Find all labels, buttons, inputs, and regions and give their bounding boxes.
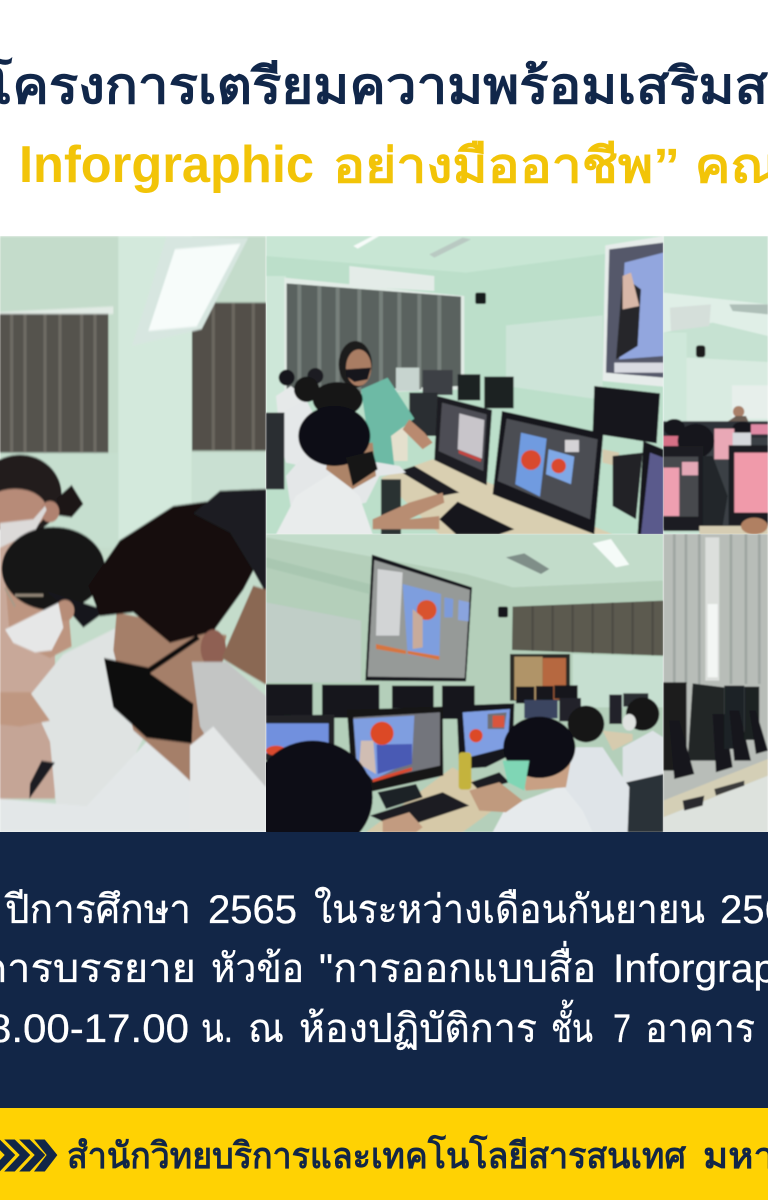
keyboards xyxy=(370,772,509,829)
background screens xyxy=(663,424,768,459)
student at front of teacher xyxy=(286,382,406,519)
right monitor xyxy=(457,703,514,769)
info line 3: ชั้น xyxy=(551,999,593,1051)
photo: students facing projected screen xyxy=(253,534,663,854)
info line 2 xyxy=(0,941,768,991)
left whiteboard xyxy=(266,602,361,682)
desks xyxy=(381,428,619,534)
monitors from behind xyxy=(663,682,768,779)
dark row of students xyxy=(663,421,768,438)
pillar xyxy=(664,334,686,420)
background monitors xyxy=(396,368,514,436)
lower wall xyxy=(573,654,663,707)
speaker xyxy=(475,293,486,304)
seated student xyxy=(678,424,728,526)
monitor three xyxy=(638,441,663,534)
front student with green mask xyxy=(469,717,593,832)
organisation name: สำนักวิทยบริการและเทคโนโลยีสารสนเทศ xyxy=(67,1134,687,1176)
left monitor xyxy=(663,446,703,531)
front student in black mask xyxy=(276,406,444,534)
ceiling beam xyxy=(663,293,768,336)
title line 2 thai: อย่างมืออาชีพ” คณ xyxy=(333,140,768,193)
info panel xyxy=(0,832,768,1108)
student with glasses and white mask xyxy=(0,527,143,810)
info line 2: หัวข้อ xyxy=(211,947,304,991)
middle student xyxy=(559,706,629,832)
nearest student and plastic item xyxy=(190,489,266,832)
info line 3: ห้องปฏิบัติการ xyxy=(299,1007,537,1051)
photo: wide view of the classroom with lecturer xyxy=(663,236,768,534)
info line 1: 2565 xyxy=(208,888,297,932)
centre monitor xyxy=(347,707,443,809)
blinds xyxy=(512,601,663,656)
info line 1: ปีการศึกษา xyxy=(5,888,191,932)
left monitor xyxy=(266,715,334,761)
window blind left xyxy=(0,314,108,453)
back wall and board xyxy=(687,358,768,423)
info line 3: ณ xyxy=(248,1007,284,1051)
dark back chair xyxy=(613,453,643,519)
right dark monitor xyxy=(593,386,660,443)
teacher in teal shirt xyxy=(339,341,433,468)
back row monitors xyxy=(266,684,578,719)
right monitor xyxy=(729,445,768,525)
lecturer xyxy=(726,406,749,423)
desk and hand xyxy=(699,518,768,534)
ceiling light xyxy=(148,236,248,333)
ceiling light and vent xyxy=(593,539,629,567)
info line 3: อาคาร xyxy=(645,1007,755,1051)
window blind right xyxy=(192,303,266,451)
keyboards xyxy=(399,466,514,534)
icon: chevron arrows xyxy=(0,1139,58,1172)
photo: side view of monitors and curtains xyxy=(663,534,768,832)
foreground student head xyxy=(253,741,423,854)
whiteboard xyxy=(506,315,603,400)
desks xyxy=(366,767,506,832)
background students xyxy=(266,368,323,489)
door xyxy=(510,654,570,701)
info line 2: "การออกแบบสื่อ xyxy=(319,941,596,991)
photo: close-up of students wearing masks xyxy=(0,236,266,832)
projector screen xyxy=(365,555,472,681)
photo: teacher helping students at computers xyxy=(266,236,663,534)
curtains xyxy=(674,534,759,684)
window blinds xyxy=(284,278,464,396)
info line 3: น. xyxy=(201,1007,233,1051)
speaker xyxy=(498,607,508,617)
info line 1 xyxy=(5,886,768,932)
info line 3: 7 xyxy=(613,1007,631,1051)
speaker xyxy=(696,345,705,357)
far monitors and students xyxy=(524,693,663,832)
info line 1: ในระหว่างเดือนกันยายน xyxy=(314,886,705,932)
student with black mask xyxy=(0,498,253,832)
monitor one xyxy=(434,396,492,485)
projector screen xyxy=(603,236,663,387)
title line 1: โครงการเตรียมความพร้อมเสริมส xyxy=(0,56,768,114)
long desk xyxy=(663,759,768,832)
info line 3 xyxy=(0,999,755,1051)
footer bar xyxy=(0,1108,768,1200)
ceiling lights xyxy=(353,236,379,249)
air conditioner xyxy=(349,266,434,291)
woman in background xyxy=(0,455,83,799)
monitor two with posters xyxy=(493,411,603,534)
bottle xyxy=(459,752,471,790)
title line 2 latin: Inforgraphic xyxy=(19,136,314,194)
